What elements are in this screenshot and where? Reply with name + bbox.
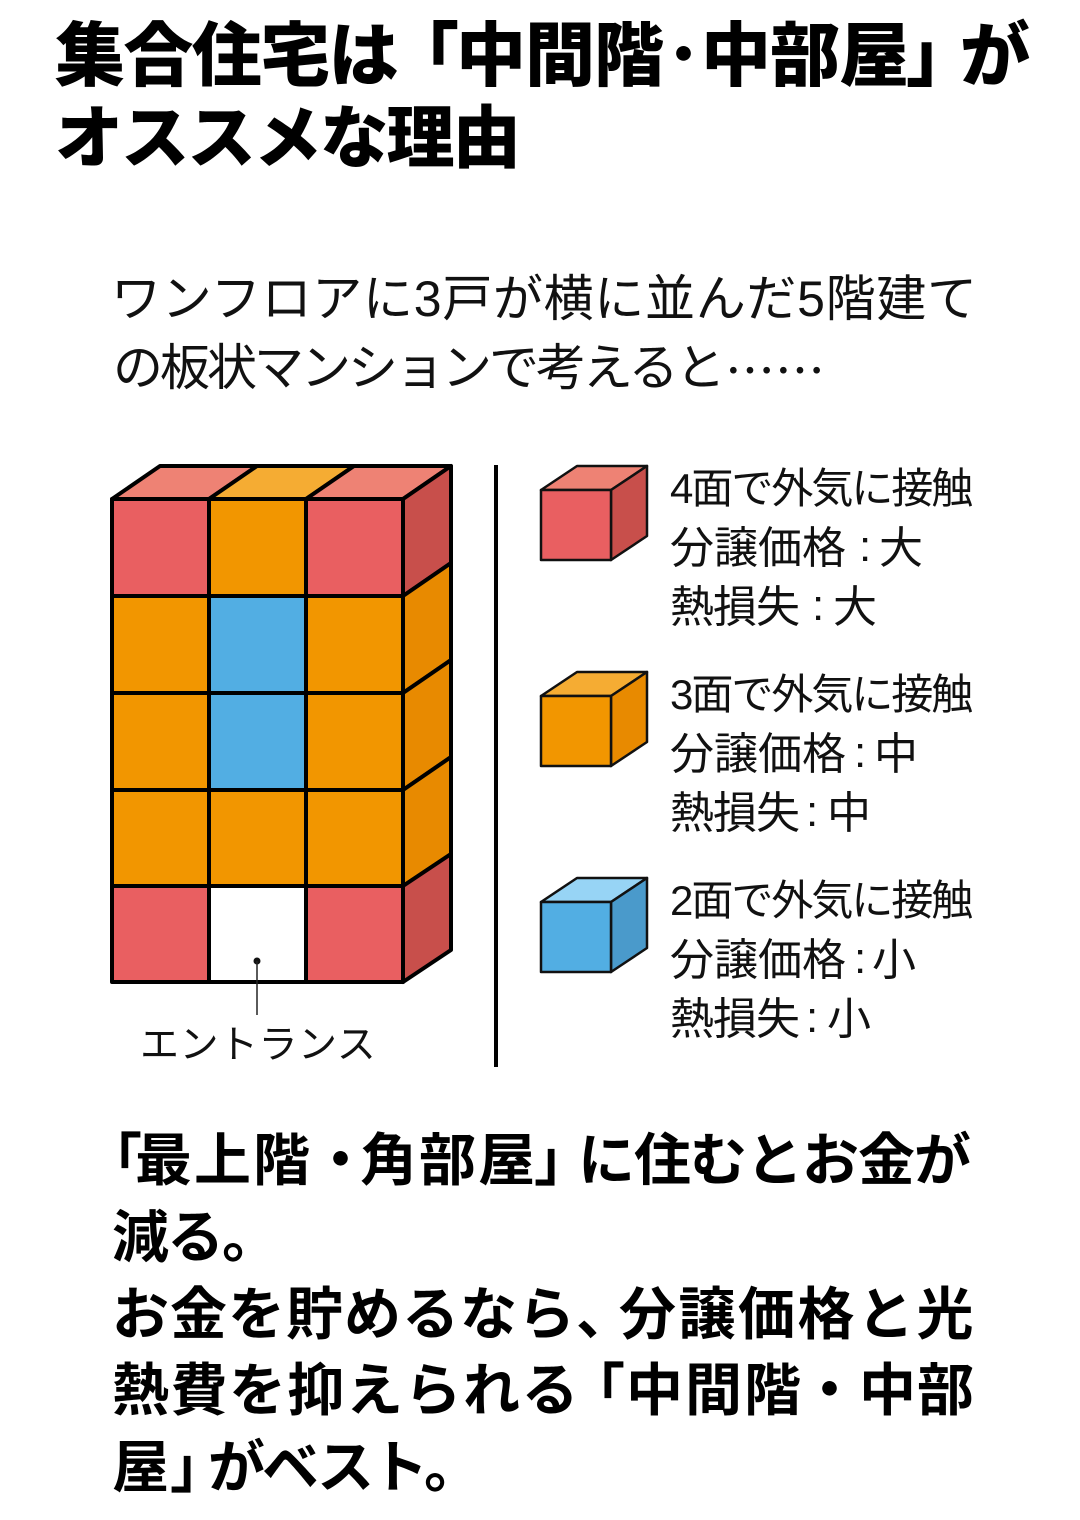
legend: 2 faces: : (806, 993, 818, 1042)
title: 集合住宅は (55, 17, 397, 95)
conclusion text: に住むとお金が (578, 1129, 970, 1193)
legend: 3 faces (670, 671, 972, 838)
legend: 3 faces: 熱損失 (670, 789, 799, 838)
conclusion text: ・ (312, 1129, 370, 1193)
legend: 3 faces: 中 (827, 789, 871, 838)
conclusion text: 中部 (859, 1359, 975, 1423)
legend: 3 faces: : (806, 787, 818, 836)
legend: 2 faces: 熱損失 (670, 995, 799, 1044)
intro text: の板状マンションで考えると (113, 340, 722, 396)
conclusion text: 屋 (112, 1436, 170, 1500)
conclusion text: 中間階 (626, 1359, 803, 1423)
conclusion text (85, 1129, 976, 1500)
conclusion text: 角部屋 (360, 1129, 537, 1193)
conclusion text: 熱費を抑えられる (112, 1359, 580, 1423)
icon: orange cube (540, 670, 648, 768)
conclusion text: 」 (534, 1129, 592, 1193)
title: ･ (666, 17, 699, 95)
conclusion text: 最上階 (135, 1129, 312, 1193)
intro text: …… (725, 332, 825, 404)
legend: 4 faces: 大 (833, 583, 877, 632)
conclusion text: 「 (568, 1359, 626, 1423)
legend: 4 faces: 4面で外気に接触 (670, 465, 971, 512)
title: が (960, 17, 1028, 95)
legend: 4 faces: 分譲価格 (670, 524, 846, 573)
title: 中部屋 (701, 17, 908, 95)
conclusion text: がベスト。 (208, 1436, 478, 1500)
legend: 4 faces: : (859, 522, 871, 571)
icon: blue cube (540, 876, 648, 974)
conclusion text: 減る。 (112, 1206, 277, 1270)
intro text (111, 271, 978, 404)
icon: red cube (540, 464, 648, 562)
legend: 2 faces (670, 877, 972, 1044)
title (55, 17, 1030, 177)
legend: 2 faces: 2面で外気に接触 (670, 877, 971, 924)
entrance pointer (254, 958, 260, 1015)
conclusion text: 」 (170, 1436, 228, 1500)
legend: 2 faces: 分譲価格 (670, 936, 846, 985)
conclusion text: お金を貯めるなら、 (112, 1283, 634, 1347)
legend: 3 faces: 分譲価格 (670, 730, 846, 779)
intro text: ワンフロアに3戸が横に並んだ5階建て (111, 271, 978, 327)
legend: 2 faces: : (854, 934, 866, 983)
conclusion text: 分譲価格と光 (619, 1283, 976, 1347)
conclusion text: ・ (801, 1359, 859, 1423)
legend: 4 faces: : (812, 581, 824, 630)
legend: 4 faces: 大 (879, 524, 923, 573)
legend: 2 faces: 小 (827, 995, 871, 1044)
title: オススメな理由 (55, 101, 519, 177)
legend: 4 faces: 熱損失 (670, 583, 799, 632)
conclusion text: 「 (85, 1129, 143, 1193)
legend: 3 faces: 3面で外気に接触 (670, 671, 971, 718)
legend: 3 faces: 中 (874, 730, 918, 779)
legend: 3 faces: : (854, 728, 866, 777)
legend: 4 faces (670, 465, 972, 632)
title: 」 (906, 17, 974, 95)
title: 「 (389, 17, 457, 95)
legend: 2 faces: 小 (872, 936, 916, 985)
entrance label: エントランス (140, 1024, 376, 1067)
title: 中間階 (456, 17, 663, 95)
building diagram (110, 464, 453, 984)
front faces (112, 499, 403, 982)
roof faces (112, 466, 451, 499)
side faces (403, 466, 451, 982)
